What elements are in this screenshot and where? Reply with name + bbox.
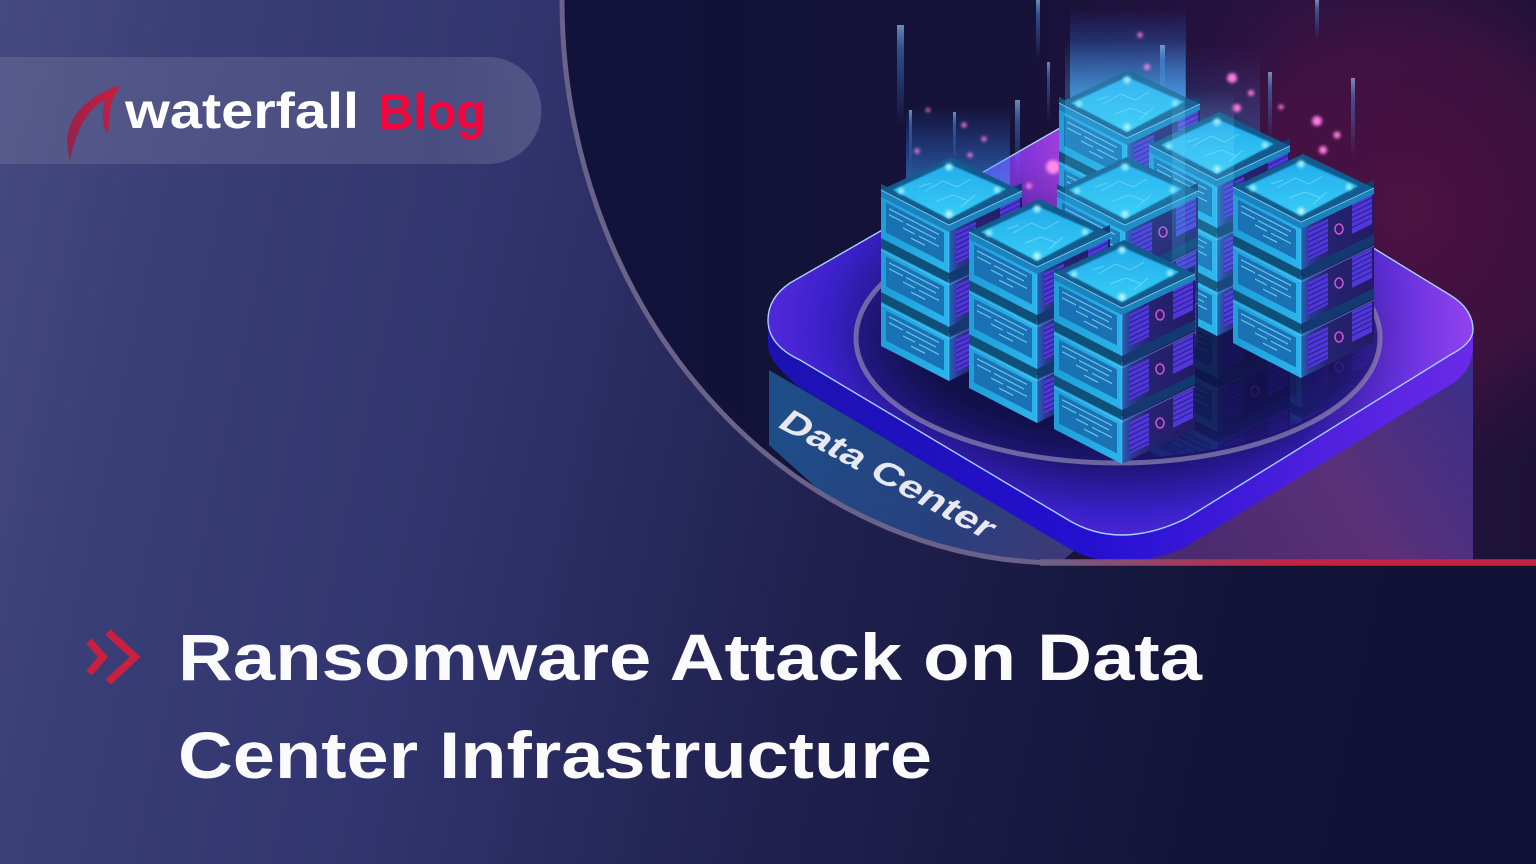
- server stack: left middle: [969, 199, 1110, 423]
- light beams: [897, 0, 1355, 205]
- server stack: front: [1054, 240, 1195, 464]
- platform side wall: [768, 320, 1473, 562]
- blog label: Blog: [378, 84, 486, 140]
- logo wordmark: waterfall: [124, 83, 359, 139]
- title: Center Infrastructure: [178, 718, 932, 792]
- server stack: far right: [1233, 154, 1374, 378]
- label strip: data center ribbon: [769, 370, 1075, 563]
- floor reflections: [1149, 326, 1372, 456]
- server stack: right back: [1149, 112, 1290, 336]
- glowing particles: [914, 32, 1340, 189]
- panel: dark hero arc: [562, 0, 1536, 563]
- server stack: far left: [881, 157, 1022, 381]
- back stack glow overlay: [1065, 49, 1234, 312]
- arc outline and red rule: [562, 0, 1536, 563]
- title: [178, 620, 1203, 792]
- server stack: middle back: [1056, 157, 1198, 356]
- platform top surface: [768, 100, 1473, 535]
- icon: double chevron: [89, 632, 135, 682]
- icon: waterfall swoosh: [67, 85, 120, 160]
- title: Ransomware Attack on Data: [178, 620, 1203, 694]
- label: Data Center: Data Center: [771, 404, 1005, 546]
- illustration: data center: [768, 0, 1473, 563]
- logo pill: [0, 57, 541, 164]
- platform ring: [856, 213, 1380, 463]
- server stack: top back: [1058, 70, 1200, 219]
- platform shadow band: [1140, 340, 1473, 563]
